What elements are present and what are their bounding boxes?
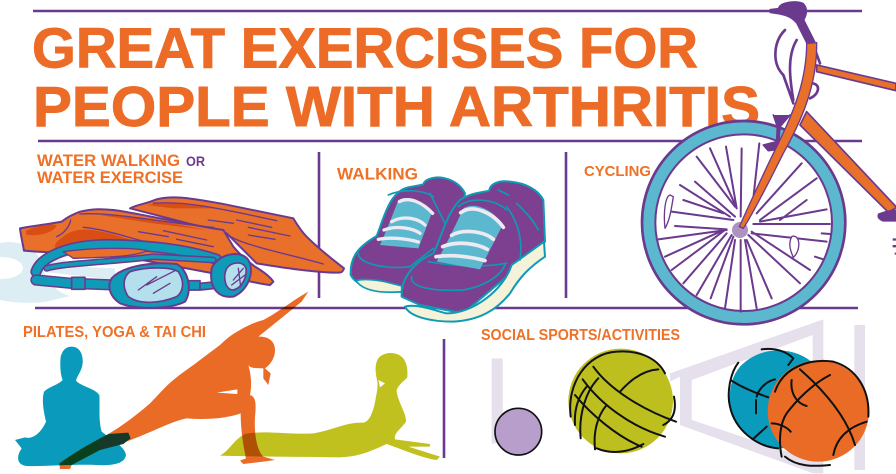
title: GREAT EXERCISES FOR	[32, 16, 698, 80]
heading: water walking or water exercise	[37, 152, 205, 187]
heading: social sports and activities: SOCIAL SPORTS/ACTIVITIES	[481, 327, 680, 344]
goggles right lens	[211, 254, 251, 297]
side angle pose figure	[59, 292, 308, 469]
yellow ball	[568, 349, 676, 453]
icon: yoga silhouettes	[15, 292, 440, 469]
heading: pilates, yoga and tai chi: PILATES, YOGA & TAI CHI	[23, 324, 206, 341]
icon: swim fins and goggles	[20, 197, 344, 308]
heading: water walking or water exercise: WATER WALKING	[37, 152, 180, 170]
pedal	[877, 209, 896, 255]
water splash background	[0, 242, 70, 303]
teal ball	[729, 349, 817, 448]
heading: cycling: CYCLING	[584, 163, 651, 180]
front shoe	[402, 181, 545, 322]
goggles pale interior	[40, 259, 115, 280]
cobra pose figure	[220, 353, 440, 460]
icon: bicycle	[642, 2, 896, 324]
bicycle wheel	[642, 121, 845, 324]
goggles left lens	[109, 263, 189, 308]
top tube	[817, 65, 896, 91]
title: PEOPLE WITH ARTHRITIS	[33, 75, 760, 139]
front fin	[20, 209, 273, 285]
heading: walking: WALKING	[337, 166, 418, 184]
wheel spokes	[658, 143, 830, 312]
hoop backdrop	[492, 319, 865, 473]
orange ball	[768, 360, 869, 466]
back shoe	[351, 177, 465, 292]
down tube	[800, 112, 896, 212]
title	[32, 16, 760, 139]
handlebar and cable	[763, 2, 820, 151]
heading: water walking or water exercise: OR	[186, 153, 205, 169]
goggles strap	[36, 245, 217, 285]
back fin	[130, 197, 344, 273]
icon: basketball hoop and balls	[492, 319, 869, 473]
heading: water walking or water exercise: WATER EXERCISE	[37, 169, 183, 187]
icon: sneakers	[351, 177, 545, 322]
meditating figure	[15, 347, 126, 466]
fork	[739, 43, 817, 228]
purple ball	[495, 408, 542, 455]
